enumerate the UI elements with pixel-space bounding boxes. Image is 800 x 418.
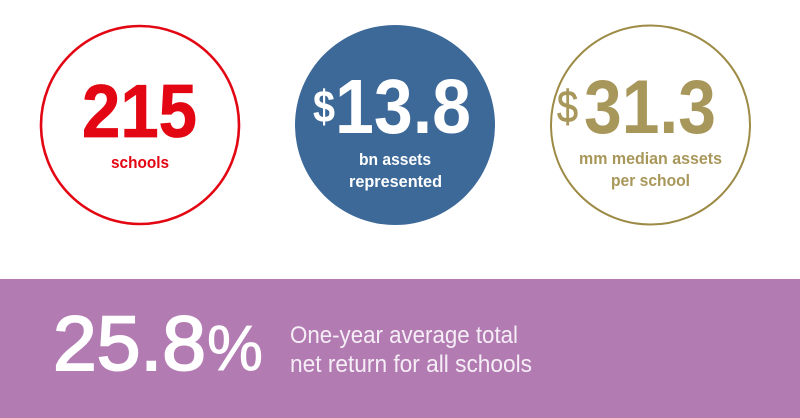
description: one-year average total net return <box>290 322 532 378</box>
statistic: $13.8: 13.8 <box>335 64 471 150</box>
label: mm median assets per school <box>579 150 722 190</box>
panel: average return banner <box>0 279 800 418</box>
label: bn assets represented: bn assets <box>359 151 431 169</box>
label: bn assets represented <box>349 151 442 191</box>
statistic: 215: 215 <box>82 69 197 153</box>
description: one-year average total net return: net return for all schools <box>290 351 532 378</box>
description: one-year average total net return: One-year average total <box>290 322 518 349</box>
panel: assets represented circle <box>295 25 495 225</box>
statistic: $13.8: $ <box>313 81 335 132</box>
statistic: $31.3: 31.3 <box>584 65 716 150</box>
label: mm median assets per school: mm median assets <box>579 150 722 168</box>
label: bn assets represented: represented <box>349 173 442 191</box>
statistic: 25.8%: 25.8 <box>53 301 206 387</box>
statistic: $31.3: $ <box>557 81 578 132</box>
label: schools: schools <box>111 154 169 172</box>
panel: median assets circle <box>551 26 750 224</box>
panel: schools circle <box>41 26 239 224</box>
statistic: 25.8%: % <box>207 312 263 384</box>
label: mm median assets per school: per school <box>611 172 690 190</box>
